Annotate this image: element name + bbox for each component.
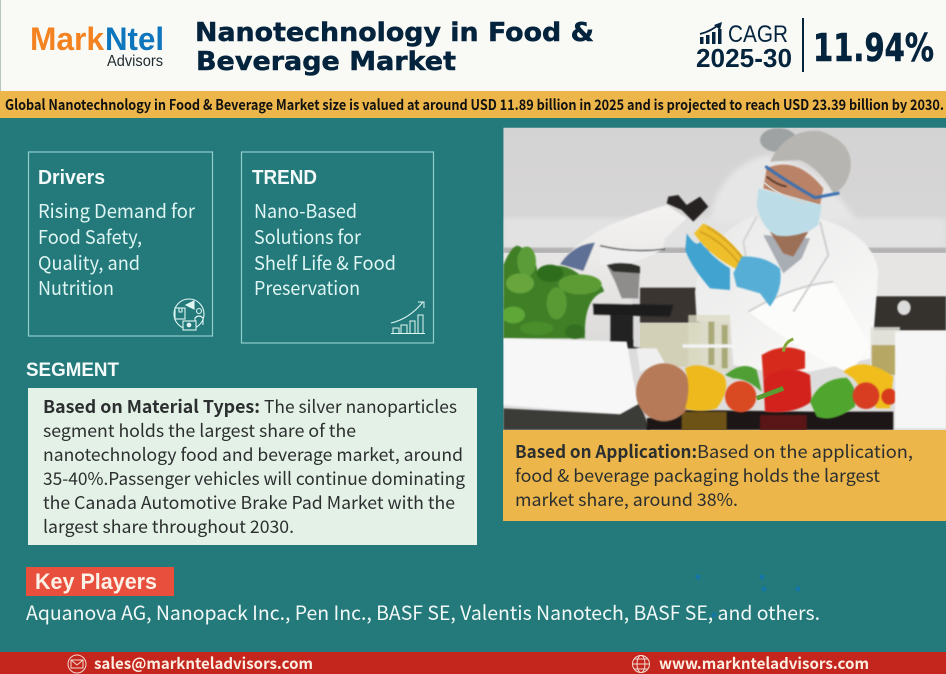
beaker (871, 327, 900, 377)
goggles strap (765, 166, 839, 198)
panel: segment text: The silver nanoparticles (264, 394, 457, 419)
panel: drivers: Food Safety, (38, 223, 142, 250)
panel: trend (242, 152, 434, 343)
panel: based on application: food & beverage packaging holds the largest (515, 463, 880, 488)
CAGR label: CAGR (728, 21, 788, 48)
logo (30, 21, 164, 70)
panel: trend: Shelf Life & Food (254, 249, 396, 276)
background person (710, 155, 857, 222)
header (0, 0, 946, 91)
hairnet (770, 131, 851, 193)
panel: segment text: segment holds the largest share of the (43, 418, 356, 443)
website: www.marknteladvisors.com (659, 652, 869, 674)
decorative dots (696, 574, 800, 618)
panel: segment text: largest share throughout 2030. (43, 514, 294, 539)
mask (757, 188, 822, 236)
panel: trend: Solutions for (254, 223, 362, 250)
icon: drivers globe (174, 299, 204, 330)
CAGR label (696, 21, 792, 73)
lab coat (695, 215, 878, 372)
gloves (685, 233, 730, 290)
icon: CAGR growth chart (700, 22, 722, 44)
panel: based on application: market share, around 38%. (515, 487, 738, 512)
yellow pepper right (843, 364, 893, 408)
panel: drivers: Drivers (38, 167, 105, 189)
icon: email (68, 655, 86, 673)
dark table (647, 410, 893, 430)
tomato left (725, 381, 756, 412)
green pepper right (810, 378, 856, 419)
title (195, 18, 594, 77)
potato (636, 363, 692, 421)
red pepper back (762, 347, 805, 378)
email address: sales@marknteladvisors.com (94, 652, 313, 674)
panel: segment text: the Canada Automotive Brake Pad Market with the (43, 490, 455, 515)
logo: Mark (30, 21, 104, 57)
photo: food scientist with vegetables (502, 128, 946, 430)
corn (694, 223, 748, 270)
white boxes (503, 338, 638, 414)
panel: trend: Nano-Based (254, 197, 357, 224)
footer (0, 652, 946, 674)
logo: Advisors (107, 53, 163, 70)
panel: drivers: Quality, and (38, 249, 140, 276)
white box right (895, 332, 946, 428)
CAGR label: 2025-30 (696, 43, 792, 73)
panel: drivers: Nutrition (38, 274, 114, 301)
green pepper small (725, 366, 762, 392)
icon: trend chart (391, 302, 425, 334)
panel: segment text (28, 388, 477, 545)
title: Beverage Market (196, 47, 456, 77)
tomatoes right (853, 382, 879, 409)
panel: drivers: Rising Demand for (38, 197, 196, 224)
basil (502, 246, 604, 339)
panel: segment text: nanotechnology food and beverage market, around (43, 442, 463, 467)
heading: segment: SEGMENT (26, 360, 119, 381)
panel: segment text: 35-40%.Passenger vehicles will continue dominating (43, 466, 465, 491)
panel: trend: TREND (252, 167, 317, 189)
key players heading: Key Players (35, 569, 157, 594)
panel: based on application (503, 430, 946, 521)
red pepper front (763, 369, 812, 412)
microscope (560, 195, 708, 348)
wall and bench (503, 128, 946, 430)
test tubes (683, 315, 735, 372)
face (763, 165, 823, 205)
panel: drivers (28, 152, 212, 336)
title: Nanotechnology in Food & (195, 18, 594, 48)
key players list: Aquanova AG, Nanopack Inc., Pen Inc., BASF SE, Valentis Nanotech, BASF SE, and others. (26, 597, 820, 626)
panel: based on application: Based on Application: (515, 439, 697, 464)
panel: trend: Preservation (254, 274, 360, 301)
yellow pepper left (685, 365, 726, 411)
panel: based on application: Based on the application, (697, 439, 913, 464)
icon: globe (632, 656, 650, 672)
logo: Ntel (105, 21, 164, 57)
panel: segment text: Based on Material Types: (43, 394, 260, 419)
